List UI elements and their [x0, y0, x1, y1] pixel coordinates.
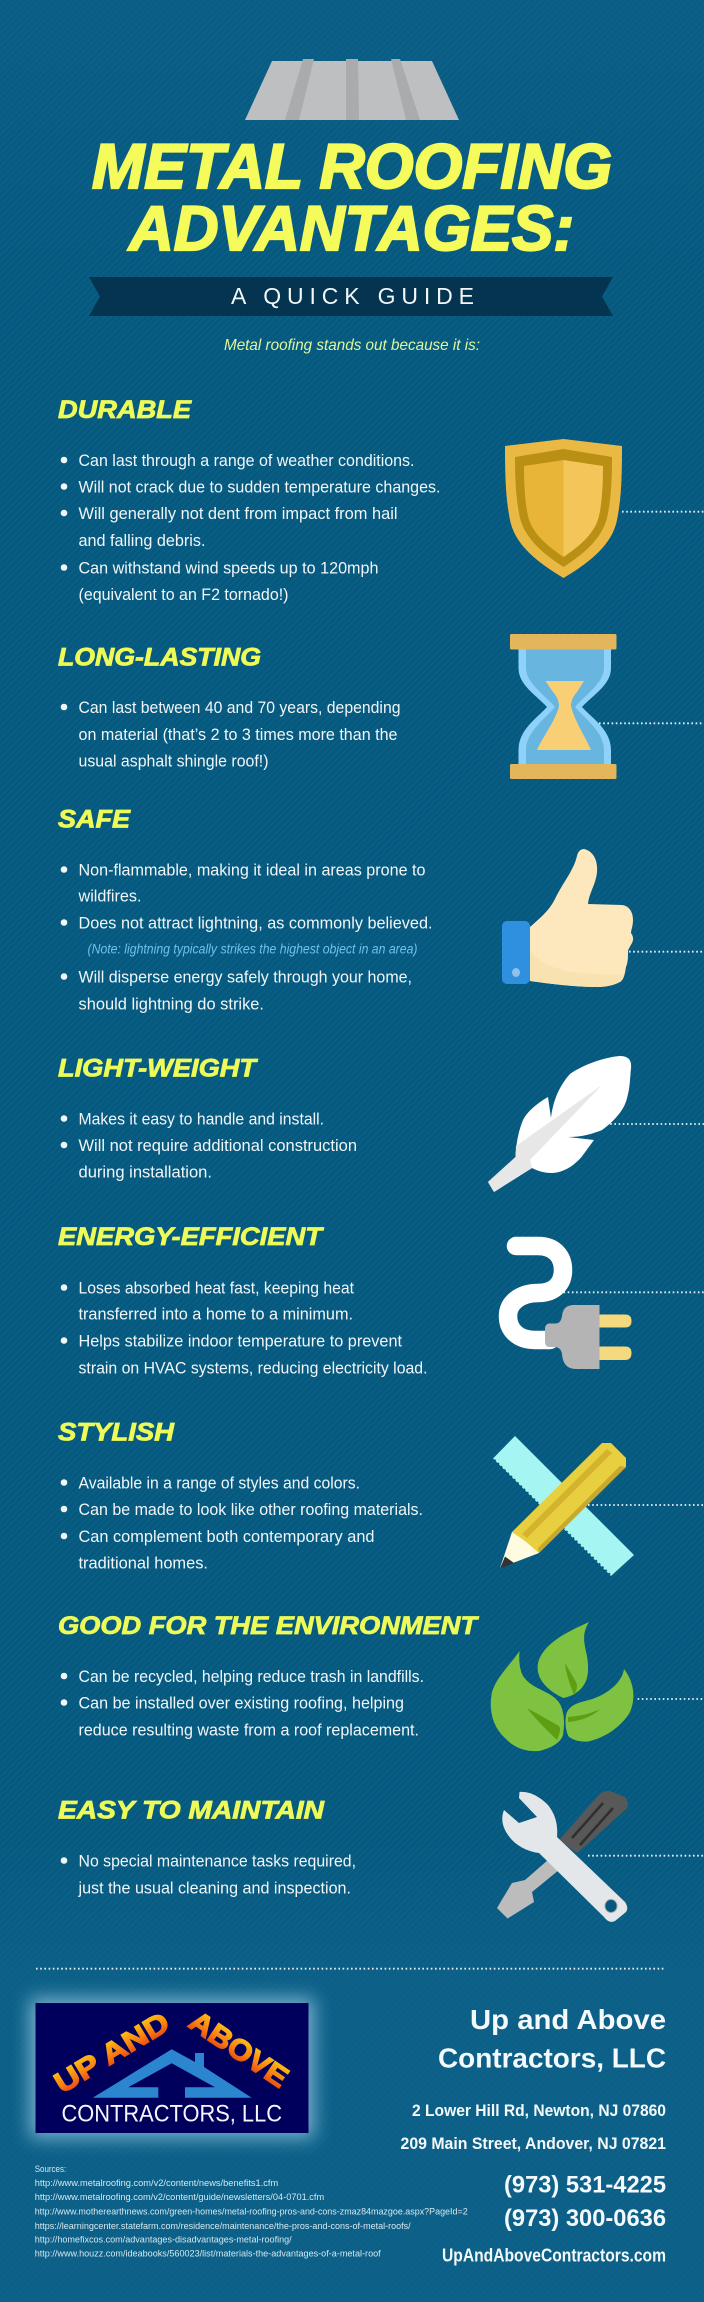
- bullet list: durable: and falling debris.: [78, 532, 206, 550]
- connector: safe: [629, 951, 704, 953]
- bullet list: safe: Does not attract lightning, as commonly believed.: [78, 914, 432, 932]
- bullet list: stylish: Can complement both contemporary and: [78, 1528, 374, 1546]
- addresses: 2 Lower Hill Rd, Newton, NJ 07860: [412, 2102, 666, 2120]
- heading: easy to maintain: EASY TO MAINTAIN: [58, 1796, 325, 1824]
- bullet list: safe: Will disperse energy safely through your home,: [78, 968, 412, 986]
- contact details: [400, 2004, 666, 2266]
- phone numbers: (973) 300-0636: [504, 2205, 666, 2232]
- heading: long-lasting: LONG-LASTING: [58, 644, 261, 672]
- logo roof mark: [93, 2049, 252, 2098]
- company name: Up and Above: [470, 2004, 666, 2035]
- banner: a quick guide: [89, 277, 613, 316]
- bullet list: environment: reduce resulting waste from a roof replacement.: [78, 1722, 419, 1740]
- connector: light-weight: [606, 1123, 704, 1125]
- heading: durable: DURABLE: [58, 396, 192, 424]
- bullet list: stylish: Available in a range of styles and colors.: [78, 1474, 360, 1492]
- sources: Sources:: [35, 2164, 66, 2174]
- bullet list: long-lasting: on material (that’s 2 to 3 times more than the: [78, 726, 398, 744]
- bullet list: light-weight: during installation.: [78, 1164, 212, 1182]
- icon: shield: [505, 439, 622, 578]
- bullet list: safe: [61, 862, 432, 1014]
- connector: stylish: [588, 1504, 704, 1506]
- banner: a quick guide: A QUICK GUIDE: [231, 283, 474, 309]
- bullet list: long-lasting: Can last between 40 and 70 years, depending: [78, 699, 400, 717]
- addresses: 209 Main Street, Andover, NJ 07821: [400, 2135, 666, 2153]
- bullet list: long-lasting: usual asphalt shingle roof!): [78, 752, 268, 770]
- title: METAL ROOFING: [92, 132, 612, 202]
- bullet list: environment: Can be recycled, helping reduce trash in landfills.: [78, 1668, 424, 1686]
- bullet list: environment: [61, 1668, 424, 1740]
- logo: [30, 1998, 314, 2138]
- addresses: [400, 2102, 666, 2153]
- phone numbers: [504, 2172, 666, 2232]
- heading: light-weight: LIGHT-WEIGHT: [58, 1054, 259, 1082]
- bullet list: safe: Non-flammable, making it ideal in areas prone to: [78, 862, 426, 880]
- connector: energy-efficient: [564, 1291, 704, 1293]
- panel: long-lasting: [58, 634, 704, 779]
- connector: maintain: [588, 1855, 704, 1857]
- company name: [438, 2004, 666, 2074]
- panel: safe: [58, 806, 704, 1014]
- icon: electric plug: [508, 1246, 632, 1369]
- company name: Contractors, LLC: [438, 2043, 666, 2074]
- panel: easy to maintain: [58, 1791, 704, 1922]
- icon: thumbs up: [502, 849, 633, 987]
- sources: http://www.metalroofing.com/v2/content/news/benefits1.cfm: [35, 2178, 278, 2188]
- panel: durable: [58, 396, 704, 604]
- logo words: contractors: CONTRACTORS, LLC: [62, 2100, 282, 2128]
- sources: http://www.metalroofing.com/v2/content/guide/newsletters/04-0701.cfm: [35, 2192, 324, 2202]
- heading: good for the environment: GOOD FOR THE ENVIRONMENT: [58, 1612, 480, 1640]
- sources: http://www.motherearthnews.com/green-homes/metal-roofing-pros-and-cons-zmaz84mazgoe.aspx?PageId=2: [35, 2207, 468, 2217]
- panel: light-weight: [58, 1054, 704, 1192]
- bullet list: durable: [61, 452, 440, 604]
- panel: stylish: [58, 1418, 704, 1576]
- bullet list: energy-efficient: strain on HVAC systems, reducing electricity load.: [78, 1360, 428, 1378]
- bullet list: light-weight: Will not require additional construction: [78, 1137, 357, 1155]
- bullet list: durable: Can last through a range of weather conditions.: [78, 452, 414, 470]
- heading: energy-efficient: ENERGY-EFFICIENT: [58, 1223, 325, 1251]
- logo words: up and above: ABOVE: [183, 2005, 294, 2094]
- logo words: up and above: UP AND: [49, 2007, 175, 2100]
- icon: feather: [488, 1056, 631, 1192]
- sources: http://homefixcos.com/advantages-disadvantages-metal-roofing/: [35, 2235, 292, 2245]
- bullet list: durable: Will not crack due to sudden temperature changes.: [78, 478, 440, 496]
- bullet list: long-lasting: [61, 699, 400, 770]
- icon: metal roof panel: [245, 59, 459, 120]
- panel: energy-efficient: [58, 1223, 704, 1378]
- icon: wrench and screwdriver: [497, 1791, 628, 1922]
- heading: safe: SAFE: [58, 806, 131, 834]
- title: ADVANTAGES:: [127, 194, 574, 264]
- connector: long-lasting: [599, 722, 704, 724]
- icon: green leaves: [491, 1622, 633, 1751]
- divider: [36, 1968, 664, 1970]
- website: UpAndAboveContractors.com: [442, 2246, 666, 2266]
- bullet list: light-weight: [61, 1110, 357, 1182]
- bullet list: durable: Can withstand wind speeds up to 120mph: [78, 560, 378, 578]
- subtitle: Metal roofing stands out because it is:: [224, 337, 480, 354]
- heading: stylish: STYLISH: [58, 1418, 175, 1446]
- panel: good for the environment: [58, 1612, 704, 1751]
- bullet list: energy-efficient: [61, 1280, 427, 1378]
- bullet list: stylish: Can be made to look like other roofing materials.: [78, 1501, 423, 1519]
- bullet list: durable: (equivalent to an F2 tornado!): [78, 586, 288, 604]
- bullet list: light-weight: Makes it easy to handle and install.: [78, 1110, 324, 1128]
- bullet list: stylish: traditional homes.: [78, 1554, 208, 1572]
- sources: https://learningcenter.statefarm.com/residence/maintenance/the-pros-and-cons-of-metal-roofs/: [35, 2221, 411, 2231]
- bullet list: safe: should lightning do strike.: [78, 996, 264, 1014]
- bullet list: energy-efficient: transferred into a home to a minimum.: [78, 1306, 353, 1324]
- connector: environment: [638, 1698, 704, 1700]
- bullet list: maintain: [61, 1852, 356, 1898]
- bullet list: environment: Can be installed over existing roofing, helping: [78, 1694, 404, 1712]
- logo words: up and above: [49, 2005, 294, 2100]
- icon: ruler and pencil: [493, 1436, 634, 1576]
- connector: durable: [622, 511, 704, 513]
- bullet list: maintain: No special maintenance tasks required,: [78, 1852, 356, 1870]
- title: [92, 132, 612, 264]
- bullet list: maintain: just the usual cleaning and inspection.: [78, 1880, 351, 1898]
- bullet list: safe: (Note: lightning typically strikes the highest object in an area): [88, 942, 418, 956]
- bullet list: energy-efficient: Helps stabilize indoor temperature to prevent: [78, 1332, 402, 1350]
- bullet list: stylish: [61, 1474, 423, 1572]
- bullet list: energy-efficient: Loses absorbed heat fast, keeping heat: [78, 1280, 354, 1298]
- icon: hourglass: [510, 634, 616, 779]
- bullet list: safe: wildfires.: [78, 888, 142, 906]
- sources: http://www.houzz.com/ideabooks/560023/list/materials-the-advantages-of-a-metal-roof: [35, 2249, 381, 2259]
- bullet list: durable: Will generally not dent from impact from hail: [78, 505, 398, 523]
- sources: [35, 2164, 468, 2259]
- phone numbers: (973) 531-4225: [504, 2172, 666, 2199]
